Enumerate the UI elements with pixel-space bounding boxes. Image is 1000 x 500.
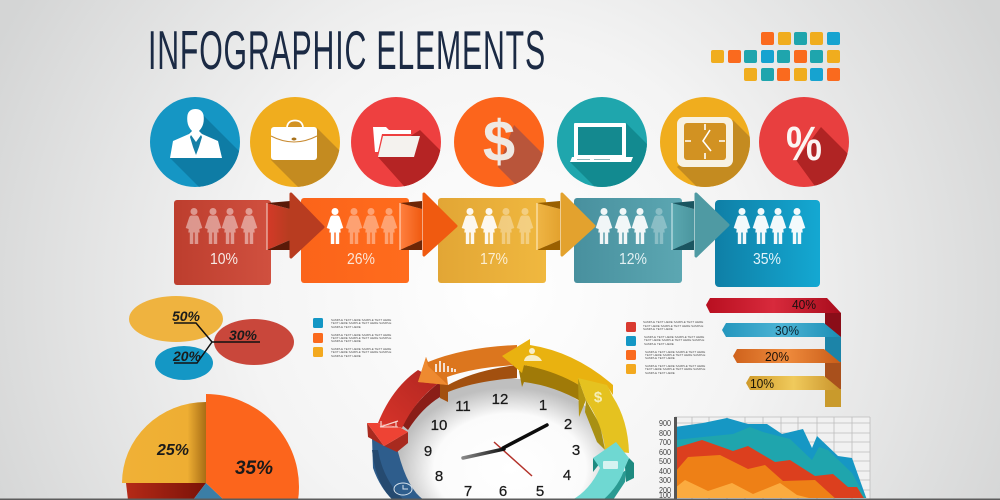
clock numerals: 3 — [572, 442, 580, 459]
ribbon bar chart: 10% — [750, 376, 774, 391]
legend: ribbon chart: SAMPLE TEXT HERE SAMPLE TEXT HERE — [645, 364, 705, 368]
pie chart — [122, 394, 299, 500]
ribbon bar chart: 30% — [775, 323, 799, 338]
legend: ribbon chart: SAMPLE TEXT HERE SAMPLE TEXT HERE — [645, 350, 705, 354]
step box 1: 10%: 10% — [210, 251, 238, 268]
icon: businessman — [150, 97, 240, 187]
decorative colour squares — [711, 32, 840, 81]
legend: bubble chart — [313, 318, 391, 358]
step box 3: 17% — [438, 198, 546, 283]
legend: bubble chart: TEXT HERE SAMPLE TEXT HERE SAMPLE — [331, 336, 391, 340]
arrow ring: orange segment — [418, 345, 517, 402]
area chart: 700 — [659, 438, 671, 447]
bottom edge line — [0, 498, 1000, 500]
clock with circular arrows — [367, 339, 634, 500]
arrow 4 — [672, 194, 728, 256]
arrow ring: red segment — [367, 370, 440, 452]
clock numerals: 7 — [464, 483, 472, 500]
clock numerals: 12 — [492, 391, 508, 408]
arrow ring: yellow right segment: $ — [594, 389, 603, 406]
legend: ribbon chart: TEXT HERE SAMPLE TEXT HERE SAMPLE — [645, 367, 705, 371]
legend: bubble chart: SAMPLE TEXT HERE SAMPLE TEXT HERE — [331, 318, 391, 322]
icon: clock square — [660, 97, 750, 187]
step box 1: 10% — [174, 200, 271, 285]
area chart: 300 — [659, 476, 671, 485]
icon: dollar — [454, 97, 544, 187]
step box 2: 26%: 26% — [347, 251, 375, 268]
title: INFOGRAPHIC ELEMENTS — [148, 21, 546, 81]
legend: ribbon chart: TEXT HERE SAMPLE TEXT HERE SAMPLE — [643, 324, 703, 328]
clock face — [389, 378, 615, 500]
legend: bubble chart: SAMPLE TEXT HERE SAMPLE TEXT HERE — [331, 333, 391, 337]
area chart: 900 — [659, 419, 671, 428]
legend: bubble chart: SAMPLE TEXT HERE SAMPLE TEXT HERE — [331, 347, 391, 351]
area chart: 800 — [659, 429, 671, 438]
clock numerals: 2 — [564, 416, 572, 433]
legend: bubble chart: TEXT HERE SAMPLE TEXT HERE SAMPLE — [331, 321, 391, 325]
arrow ring: teal segment — [572, 442, 634, 500]
area chart: 100 — [659, 491, 671, 500]
area chart — [659, 417, 870, 500]
bubble chart: 30% — [229, 327, 258, 343]
legend: bubble chart: TEXT HERE SAMPLE TEXT HERE SAMPLE — [331, 350, 391, 354]
bubble chart — [129, 296, 294, 380]
legend: ribbon chart: TEXT HERE SAMPLE TEXT HERE SAMPLE — [645, 353, 705, 357]
legend: ribbon chart: SAMPLE TEXT HERE — [645, 356, 675, 360]
legend: bubble chart: SAMPLE TEXT HERE — [331, 354, 361, 358]
clock hands — [463, 425, 547, 476]
legend: ribbon chart: SAMPLE TEXT HERE — [643, 327, 673, 331]
arrow ring: blue segment — [372, 438, 424, 500]
step box 4: 12% — [574, 198, 682, 283]
clock numerals: 10 — [431, 417, 447, 434]
pie chart: 25% — [156, 442, 189, 459]
clock numerals: 5 — [536, 483, 544, 500]
bubble chart: 20% — [172, 348, 202, 364]
area chart: 200 — [659, 486, 671, 495]
legend: ribbon chart: SAMPLE TEXT HERE SAMPLE TEXT HERE — [644, 335, 704, 339]
legend: ribbon chart: SAMPLE TEXT HERE — [645, 371, 675, 375]
arrow ring: yellow right segment — [578, 378, 629, 453]
arrow 3 — [537, 194, 594, 255]
icon: percent: % — [786, 118, 822, 171]
area chart: 400 — [659, 467, 671, 476]
clock numerals: 9 — [424, 443, 432, 460]
clock numerals: 4 — [563, 467, 571, 484]
icon: percent — [759, 97, 849, 187]
clock numerals: 11 — [455, 398, 471, 415]
pie chart: 35% — [235, 458, 273, 479]
legend: ribbon chart — [626, 320, 705, 375]
icon: folder — [351, 97, 441, 187]
legend: bubble chart: SAMPLE TEXT HERE — [331, 339, 361, 343]
step box 5: 35%: 35% — [753, 251, 781, 268]
step box 3: 17%: 17% — [480, 251, 508, 268]
clock numerals — [424, 391, 580, 500]
icon: briefcase — [250, 97, 340, 187]
legend: ribbon chart: SAMPLE TEXT HERE — [644, 342, 674, 346]
ribbon bar chart: 20% — [765, 349, 789, 364]
clock numerals: 6 — [499, 483, 507, 500]
arrow ring: gold top segment — [502, 339, 613, 402]
arrow 1 — [267, 194, 323, 257]
legend: ribbon chart: SAMPLE TEXT HERE SAMPLE TEXT HERE — [643, 320, 703, 324]
clock numerals: 1 — [539, 397, 547, 414]
area chart: 500 — [659, 457, 671, 466]
step box 5: 35% — [715, 200, 820, 287]
icon: dollar: $ — [483, 109, 515, 174]
ribbon bar chart: 40% — [792, 297, 816, 312]
legend: bubble chart: SAMPLE TEXT HERE — [331, 325, 361, 329]
bubble chart: 50% — [172, 308, 201, 324]
clock numerals: 8 — [435, 468, 443, 485]
ribbon bar chart — [706, 297, 841, 407]
step box 2: 26% — [301, 198, 409, 283]
arrow 2 — [400, 194, 456, 255]
area chart: 600 — [659, 448, 671, 457]
icon: laptop — [557, 97, 647, 187]
step box 4: 12%: 12% — [619, 251, 647, 268]
legend: ribbon chart: TEXT HERE SAMPLE TEXT HERE SAMPLE — [644, 338, 704, 342]
